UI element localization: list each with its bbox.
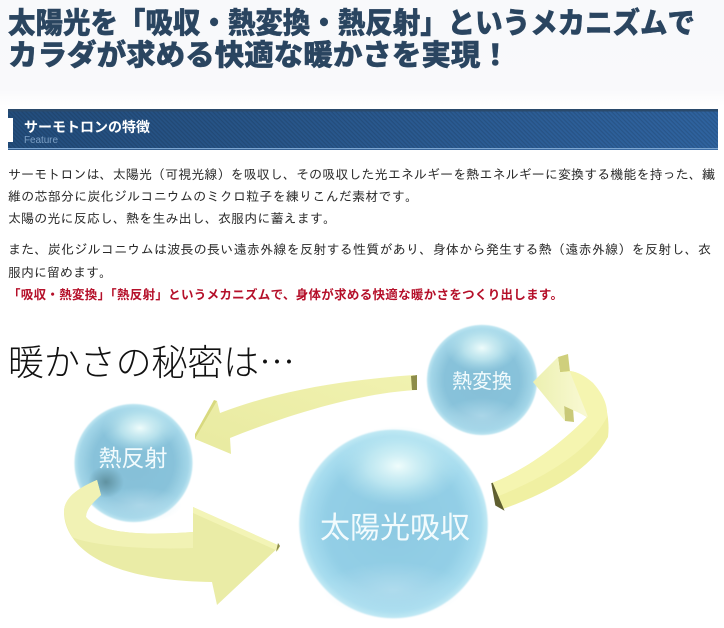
red emphasis text: 「吸収・熱変換」「熱反射」というメカニズムで、身体が求める快適な暖かさをつくり出します。 bbox=[8, 287, 563, 302]
title: 太陽光を「吸収・熱変換・熱反射」というメカニズムで bbox=[8, 6, 695, 40]
section heading band: Feature bbox=[24, 135, 58, 146]
sphere: 太陽光吸収: 太陽光吸収 bbox=[320, 512, 470, 545]
arrow: 太陽光吸収 to 熱変換 bbox=[492, 354, 609, 509]
header background bbox=[0, 0, 724, 106]
title: カラダが求める快適な暖かさを実現！ bbox=[8, 38, 510, 72]
sphere: 熱反射 bbox=[74, 404, 193, 523]
sphere: 熱反射: 熱反射 bbox=[98, 445, 168, 471]
sphere: 熱変換: 熱変換 bbox=[452, 370, 512, 393]
diagram heading: 暖かさの秘密は… bbox=[8, 334, 295, 386]
sphere: 太陽光吸収 bbox=[298, 426, 488, 619]
title bbox=[8, 6, 695, 72]
body text: description: 維の芯部分に炭化ジルコニウムのミクロ粒子を練りこんだ素材です。 bbox=[8, 189, 418, 204]
body text: description: また、炭化ジルコニウムは波長の長い遠赤外線を反射する性質があり、身体から発生する熱（遠赤外線）を反射し、衣 bbox=[8, 242, 711, 257]
sphere: 熱変換 bbox=[426, 324, 538, 436]
arrow: 熱反射 to 太陽光吸収 bbox=[64, 480, 280, 605]
body text: description: 太陽の光に反応し、熱を生み出し、衣服内に蓄えます。 bbox=[8, 211, 336, 226]
body text: description: サーモトロンは、太陽光（可視光線）を吸収し、その吸収した光エネルギーを熱エネルギーに変換する機能を持った、繊 bbox=[8, 167, 715, 182]
section heading band: サーモトロンの特徴 bbox=[24, 119, 150, 135]
section heading band bbox=[8, 109, 718, 150]
arrow: 熱変換 to 熱反射 bbox=[195, 375, 417, 454]
body text: description: 服内に留めます。 bbox=[8, 265, 112, 280]
body text: description bbox=[8, 167, 715, 280]
